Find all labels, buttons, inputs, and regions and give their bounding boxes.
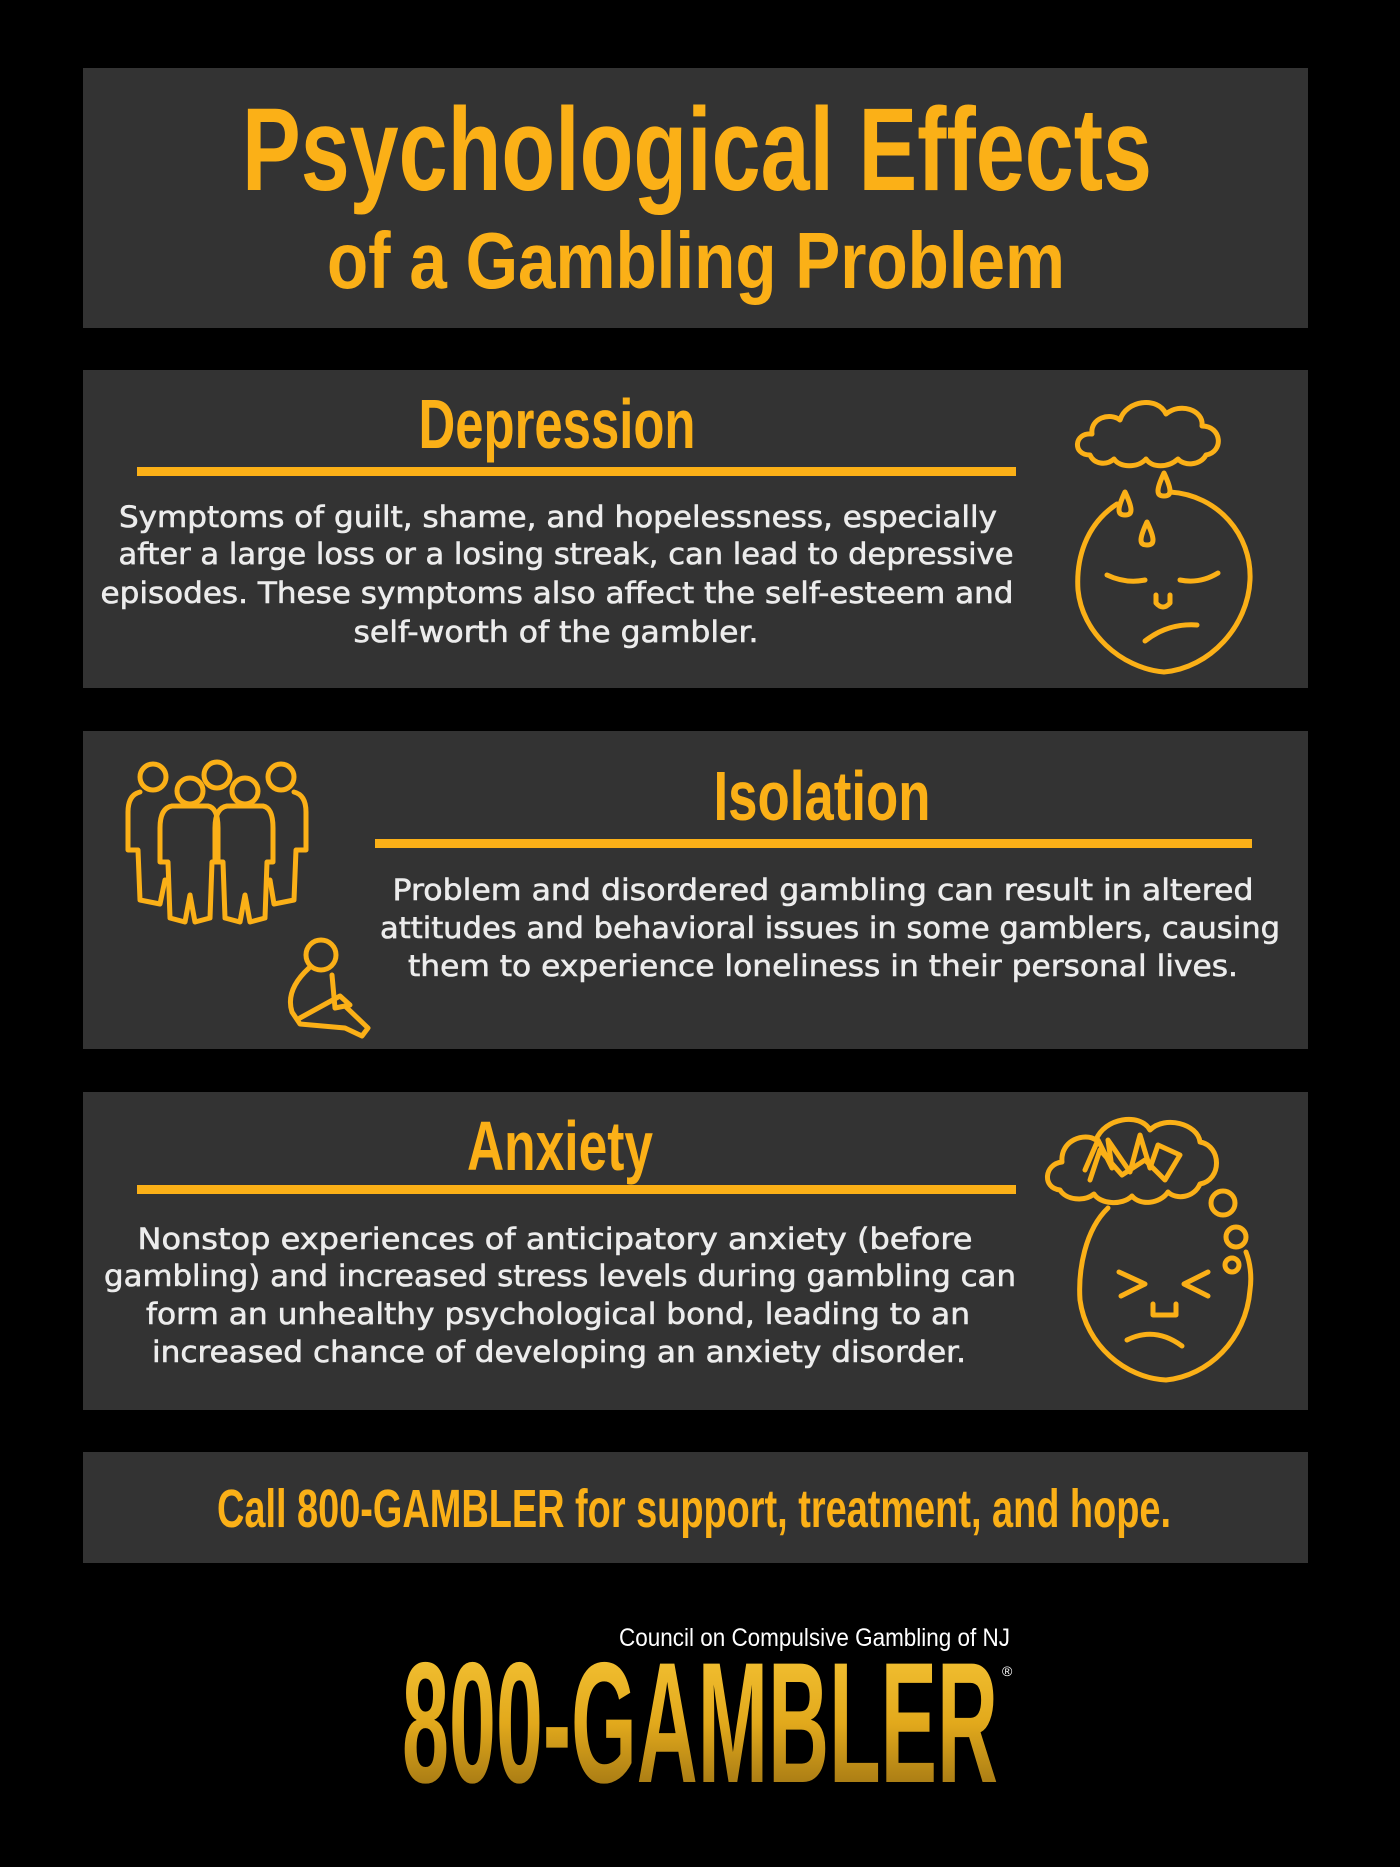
logo: 800-GAMBLER: ®: [1002, 1663, 1013, 1679]
text block: anxiety: Nonstop experiences of anticipatory anxiety (before: [138, 1222, 972, 1256]
logo: 800-GAMBLER: [402, 1624, 1013, 1819]
panel: depression: [83, 370, 1308, 688]
text block: isolation: Problem and disordered gambling can result in altered: [392, 873, 1254, 907]
call to action panel: [83, 1452, 1308, 1563]
text block: depression: episodes. These symptoms also affect the self-esteem and: [100, 576, 1014, 610]
logo tagline: Council on Compulsive Gambling of NJ: [619, 1624, 1010, 1652]
text block: depression: after a large loss or a losing streak, can lead to depressive: [118, 537, 1014, 571]
text block: anxiety: form an unhealthy psychological bond, leading to an: [146, 1297, 970, 1331]
text block: isolation: [380, 873, 1280, 983]
icon: sitting alone person: [290, 940, 368, 1036]
icon: anxious face with scribble thought: [1047, 1119, 1251, 1380]
heading: isolation: Isolation: [714, 757, 930, 835]
text block: depression: Symptoms of guilt, shame, and hopelessness, especially: [119, 500, 997, 534]
heading: anxiety: Anxiety: [467, 1107, 653, 1185]
text block: depression: [100, 500, 1014, 649]
heading: depression: Depression: [418, 385, 696, 463]
text block: isolation: attitudes and behavioral issues in some gamblers, causing: [380, 911, 1280, 945]
panel: isolation: [83, 731, 1308, 1049]
text block: anxiety: gambling) and increased stress levels during gambling can: [104, 1259, 1016, 1293]
text block: anxiety: [104, 1222, 1016, 1369]
title line 2: of a Gambling Problem: [327, 216, 1065, 305]
icon: sad face with rain cloud: [1077, 403, 1250, 672]
title panel: [83, 68, 1308, 328]
text block: anxiety: increased chance of developing an anxiety disorder.: [152, 1335, 966, 1369]
icon: group of people: [128, 762, 306, 922]
text block: isolation: them to experience loneliness in their personal lives.: [408, 949, 1238, 983]
panel: anxiety: [83, 1092, 1308, 1410]
text block: depression: self-worth of the gambler.: [354, 615, 758, 649]
